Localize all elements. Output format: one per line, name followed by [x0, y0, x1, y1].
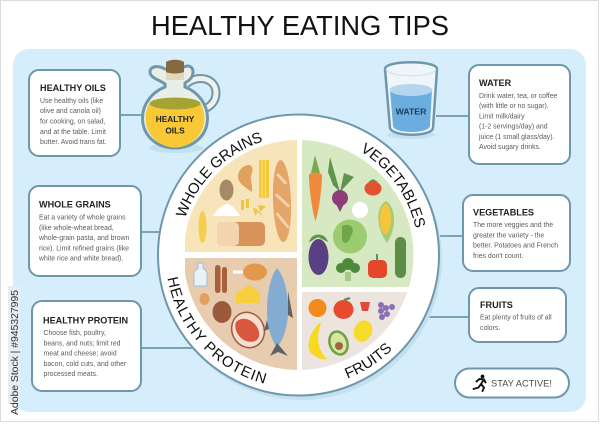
baguette	[272, 160, 292, 242]
cucumber	[395, 237, 406, 278]
plate label: vegetables: VEGETABLES	[364, 142, 425, 228]
icon: water glass	[385, 62, 437, 139]
farfalle	[253, 205, 266, 217]
panel: whole grains: (like whole-wheat bread,	[39, 225, 114, 232]
stock credit: Adobe Stock | #945327995	[9, 290, 21, 415]
croissant	[238, 165, 253, 192]
panel: water: juice (1 small glass/day).	[478, 134, 555, 141]
panel: whole grains: WHOLE GRAINS	[39, 200, 111, 210]
burger patty	[212, 301, 232, 323]
panel: healthy protein: bacon, cold cuts, and other	[44, 361, 127, 368]
panel: healthy protein: beans, and nuts; limit red	[44, 340, 121, 348]
cabbage	[333, 220, 367, 254]
plate section: whole grains	[185, 140, 297, 252]
panel: vegetables	[463, 195, 570, 271]
panel: healthy protein: processed meats.	[44, 371, 98, 378]
eggplant	[308, 239, 328, 275]
panel: water: WATER	[479, 78, 512, 88]
panel: water: Limit milk/dairy	[479, 114, 525, 120]
panel: whole grains: Eat a variety of whole grains	[39, 214, 126, 222]
tomato	[364, 182, 382, 196]
beet	[328, 157, 354, 192]
panel: whole grains: whole-grain pasta, and brown	[38, 235, 130, 242]
panel: whole grains	[29, 186, 141, 276]
flour	[213, 204, 240, 216]
drumstick	[233, 270, 244, 274]
icon: oil jug: OILS	[165, 126, 185, 136]
garlic	[352, 202, 368, 218]
plate label: healthy protein: HEALTHY PROTEIN	[168, 277, 266, 384]
callout: stay active: STAY ACTIVE!	[491, 378, 552, 388]
apple	[334, 300, 354, 319]
panel: healthy oils: butter. Avoid trans fat.	[40, 139, 107, 146]
panel: healthy oils: and at the table. Limit	[40, 129, 106, 136]
bell pepper	[368, 260, 387, 278]
panel: water	[469, 65, 570, 164]
panel: healthy protein	[32, 301, 141, 391]
plate section: healthy protein	[185, 258, 297, 370]
milk bottle	[194, 263, 207, 286]
panel: vegetables: The more veggies and the	[473, 222, 553, 229]
icon: water glass: WATER	[396, 106, 427, 116]
panel: water: (with little or no sugar).	[479, 103, 549, 110]
panel: healthy protein: Choose fish, poultry,	[44, 330, 106, 337]
title: HEALTHY EATING TIPS	[151, 10, 449, 41]
plate label: fruits: FRUITS	[344, 343, 391, 378]
panel: vegetables: better. Potatoes and French	[473, 242, 558, 250]
plate section: fruits	[302, 292, 408, 370]
avocado	[328, 330, 349, 356]
panel: water: Avoid sugary drinks.	[479, 144, 541, 151]
panel: healthy oils: Use healthy oils (like	[40, 98, 103, 105]
panel: vegetables: fries don't count.	[473, 253, 523, 260]
panel: fruits: colors.	[480, 325, 500, 332]
panel: vegetables: greater the variety - the	[473, 232, 544, 240]
panel: healthy protein: meat and cheese; avoid	[44, 350, 117, 358]
potato	[220, 180, 234, 200]
panel: fruits: Eat plenty of fruits of all	[480, 314, 552, 322]
bread loaf	[217, 222, 265, 246]
icon: runner	[474, 375, 486, 391]
panel: water: Drink water, tea, or coffee	[479, 93, 558, 100]
panel: water: (1-2 servings/day) and	[479, 124, 548, 130]
panel: whole grains: rice). Limit refined grains (like	[39, 246, 129, 252]
panel: healthy oils	[29, 70, 120, 156]
fish	[267, 268, 288, 345]
carrot	[311, 155, 320, 173]
icon: oil jug	[142, 60, 216, 153]
plate label: whole grains: WHOLE GRAINS	[176, 132, 262, 216]
panel: fruits: FRUITS	[480, 300, 513, 310]
panel: healthy oils: for cooking, on salad,	[40, 118, 106, 126]
wheat	[198, 211, 206, 243]
strawberry	[360, 302, 370, 311]
connector lines	[120, 115, 469, 348]
penne	[241, 199, 249, 210]
callout: stay active	[455, 368, 569, 398]
lemon	[354, 320, 372, 342]
panel: vegetables: VEGETABLES	[473, 208, 534, 218]
panel: whole grains: white rice and white bread).	[38, 256, 123, 262]
egg	[200, 293, 210, 305]
plate section: vegetables	[302, 140, 414, 287]
icon: oil jug: HEALTHY	[156, 114, 195, 124]
spaghetti bundle	[259, 160, 269, 198]
orange	[308, 299, 326, 317]
sausages	[215, 265, 220, 293]
broccoli	[345, 272, 351, 281]
corn	[378, 201, 394, 243]
panel: healthy protein: HEALTHY PROTEIN	[43, 316, 128, 326]
plate	[157, 114, 442, 400]
panel: healthy oils: olive and canola oil)	[40, 108, 101, 115]
cheese	[236, 285, 260, 303]
panel: fruits	[469, 288, 566, 342]
panel: healthy oils: HEALTHY OILS	[40, 83, 106, 93]
steak	[230, 312, 266, 348]
grapes	[378, 302, 395, 320]
banana	[309, 323, 327, 359]
